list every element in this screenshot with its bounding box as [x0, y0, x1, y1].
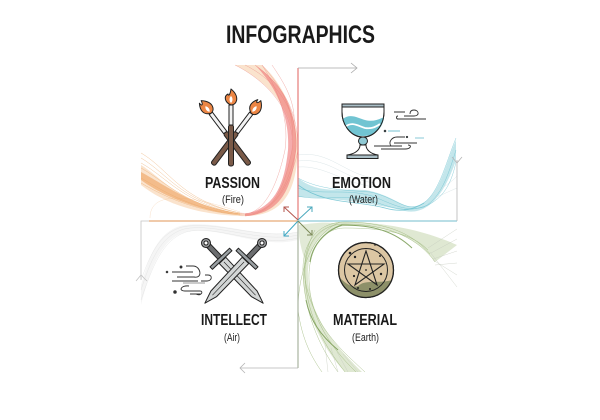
frame line: green vertical with bottom arrow	[240, 221, 298, 373]
label: intellect: (Air)	[224, 332, 240, 344]
centre torch	[225, 89, 237, 166]
icon: crossed swords (air)	[193, 230, 275, 312]
wave ribbon: water (blue)	[298, 138, 457, 212]
sword one	[193, 230, 273, 312]
title: INFOGRAPHICS	[226, 21, 375, 49]
label: material: (Earth)	[352, 332, 379, 344]
label: emotion: EMOTION	[332, 175, 391, 192]
wave ribbon: air (grey)	[141, 224, 298, 305]
icon: water wind lines	[374, 110, 426, 149]
icon: chalice (water)	[342, 104, 384, 158]
wave ribbon: earth (green)	[298, 222, 457, 372]
label: emotion: (Water)	[349, 194, 378, 206]
right torch	[208, 97, 265, 168]
label: intellect: INTELLECT	[201, 312, 267, 329]
frame line: orange horizontal with left arrow	[136, 221, 298, 281]
icon: torches (fire)	[197, 89, 265, 168]
centre arrows	[284, 207, 312, 236]
icon: pentacle (earth)	[338, 242, 394, 298]
icon: air wind lines	[166, 266, 211, 295]
label: material: MATERIAL	[333, 312, 397, 329]
label: passion	[205, 175, 260, 206]
label: material	[333, 312, 397, 344]
sword two	[195, 230, 275, 312]
wave ribbon: fire (orange to red)	[141, 65, 298, 218]
frame line: red vertical with top arrow	[298, 63, 357, 220]
label: passion: (Fire)	[222, 194, 244, 206]
label: intellect	[201, 312, 267, 344]
frame line: blue horizontal with right arrow	[298, 157, 462, 221]
label: emotion	[332, 175, 391, 206]
label: passion: PASSION	[205, 175, 260, 192]
left torch	[197, 97, 254, 168]
